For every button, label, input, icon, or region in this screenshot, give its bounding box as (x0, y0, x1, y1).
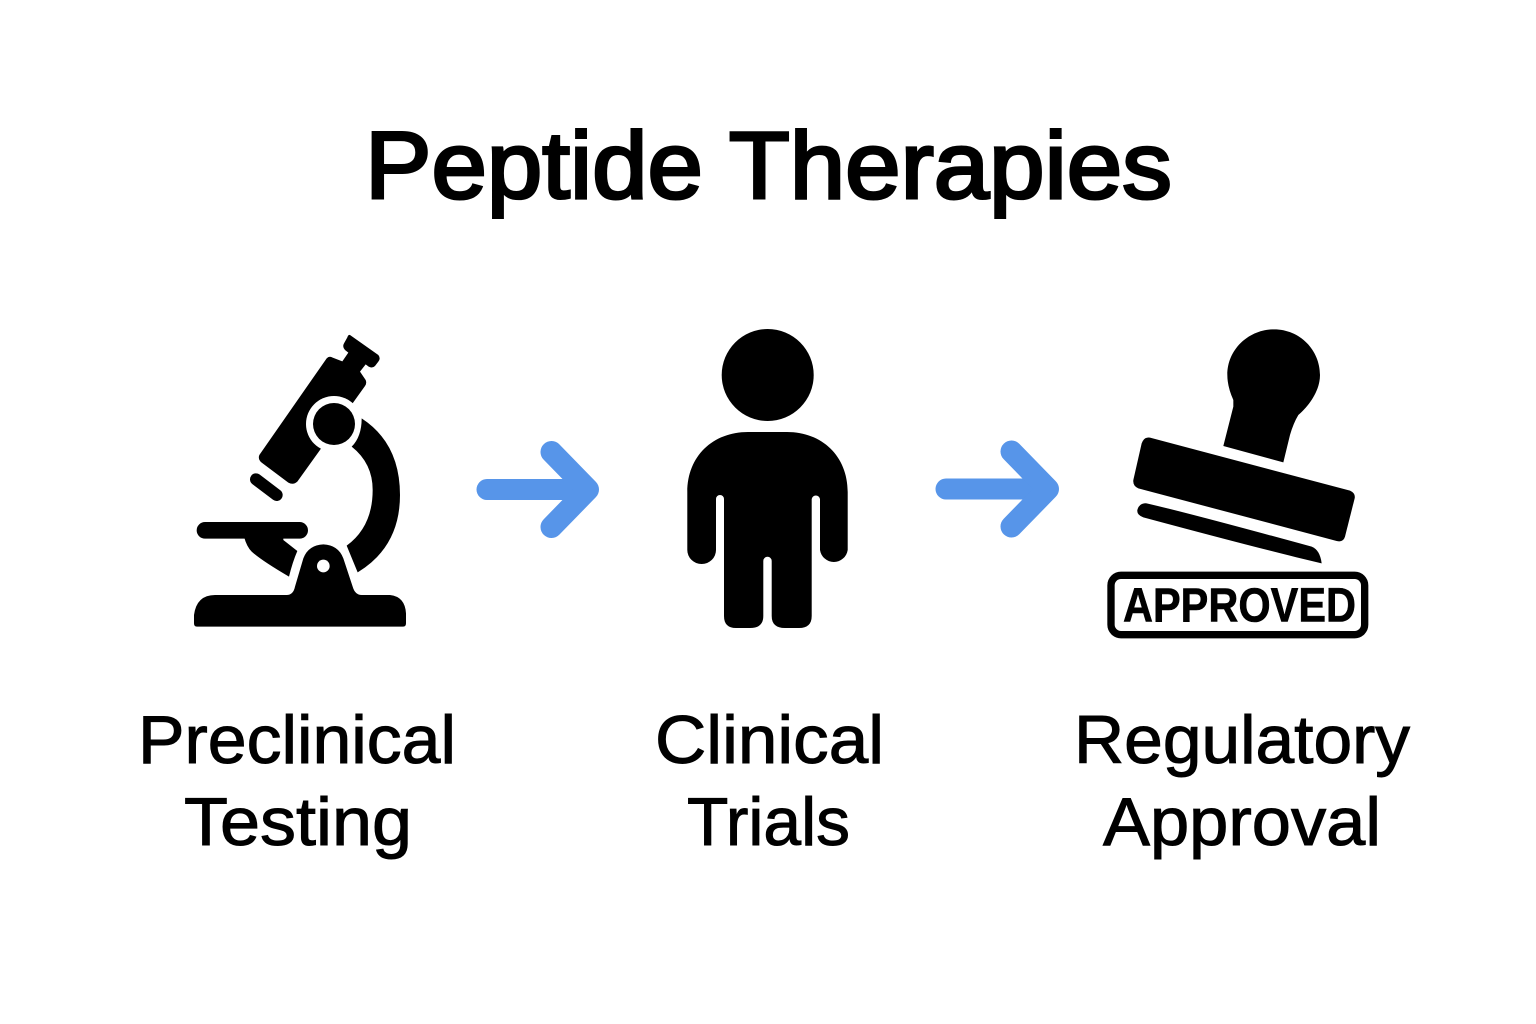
icon: microscope (194, 335, 406, 627)
label: regulatory approval: Approval (1103, 784, 1381, 860)
label: clinical trials: Clinical (655, 702, 884, 778)
icon: person (687, 329, 848, 628)
stamp label: APPROVED (1123, 580, 1356, 632)
label: preclinical testing (138, 702, 456, 860)
label: regulatory approval (1074, 702, 1410, 860)
label: regulatory approval: Regulatory (1074, 702, 1410, 778)
label: clinical trials (655, 702, 884, 860)
title: Peptide Therapies (365, 113, 1172, 219)
label: preclinical testing: Testing (184, 784, 412, 860)
label: clinical trials: Trials (687, 784, 850, 860)
label: preclinical testing: Preclinical (138, 702, 456, 778)
arrow: preclinical to clinical (487, 452, 588, 527)
arrow: clinical to regulatory (946, 452, 1048, 526)
icon: approved stamp (1111, 329, 1365, 635)
